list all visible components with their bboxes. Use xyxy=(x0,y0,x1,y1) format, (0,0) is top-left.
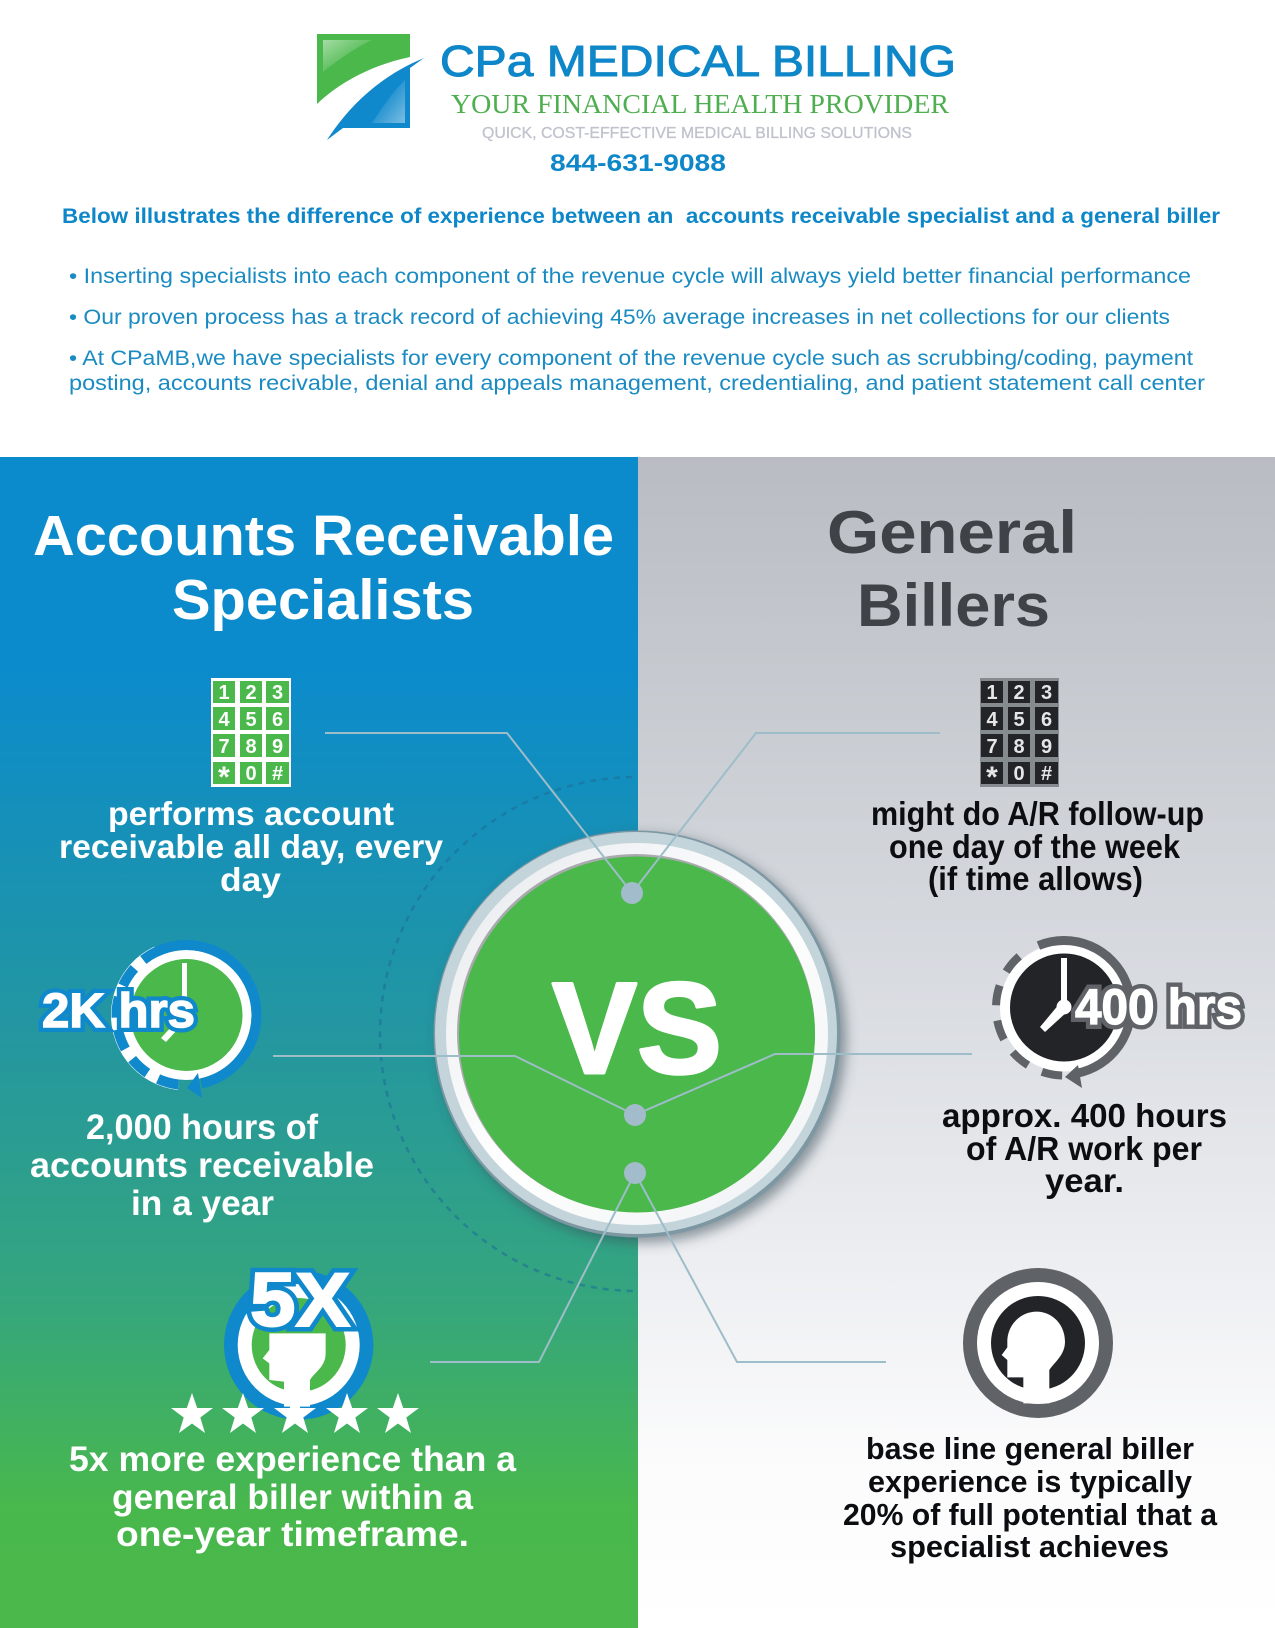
company name: CPa MEDICAL BILLING xyxy=(440,37,956,86)
text: approx. 400 hours: year. xyxy=(1045,1162,1124,1199)
text: 2,000 hours: in a year xyxy=(131,1184,274,1223)
text: base line general biller: base line general biller xyxy=(866,1431,1194,1466)
icon: five stars xyxy=(171,1393,419,1433)
panel: accounts receivable specialists background xyxy=(0,457,638,1628)
callout: 2K hrs: 2K hrs xyxy=(42,985,195,1038)
icon: green keypad: 0 xyxy=(245,763,257,785)
sub tagline: QUICK, COST-EFFECTIVE MEDICAL BILLING SOLUTIONS xyxy=(482,125,912,142)
text: 2,000 hours: 2,000 hours of xyxy=(86,1108,318,1147)
bullet 1: • Inserting specialists into each component of the revenue cycle will always yield better financial performance xyxy=(69,265,1191,288)
text: specialists perform AR every day: receivable all day, every xyxy=(59,828,444,865)
icon: dark keypad: 2 xyxy=(1013,682,1025,704)
icon: dark clock with 400 hrs xyxy=(977,920,1242,1095)
text: 5x more experience: 5x more experience than a xyxy=(69,1440,517,1479)
connector dot: top xyxy=(621,882,643,904)
icon: dark keypad: 4 xyxy=(986,709,998,731)
icon: dark keypad: * xyxy=(986,761,998,794)
icon: dark keypad: 3 xyxy=(1041,682,1052,704)
text: specialists perform AR every day xyxy=(59,795,444,898)
icon: green head with 5X xyxy=(224,1258,373,1420)
icon: dark keypad: 6 xyxy=(1041,709,1052,731)
bullet 3 xyxy=(69,347,1205,395)
heading: accounts receivable specialists xyxy=(33,504,614,632)
callout: 2K hrs: 2K hrs xyxy=(42,985,195,1038)
panel: general billers background xyxy=(638,457,1275,1628)
heading: accounts receivable specialists: Specialists xyxy=(172,568,474,632)
text: base line general biller: 20% of full potential that a xyxy=(843,1497,1218,1532)
intro bullet list xyxy=(69,265,1205,395)
connector dot: bottom xyxy=(624,1162,646,1184)
phone number: 844-631-9088 xyxy=(550,150,726,177)
icon: green keypad: 6 xyxy=(272,709,283,731)
vs label: VS xyxy=(552,955,722,1101)
icon: green keypad: # xyxy=(272,763,283,785)
text: specialists perform AR every day: performs account xyxy=(108,795,394,832)
icon: green keypad: 2 xyxy=(245,682,257,704)
text: billers might do AR one day: one day of the week xyxy=(889,828,1181,865)
icon: green keypad: 8 xyxy=(245,736,257,758)
bullet 3: • At CPaMB,we have specialists for every component of the revenue cycle such as scrubbing/coding, payment xyxy=(69,347,1193,370)
icon: dark keypad: 8 xyxy=(1013,736,1025,758)
heading: general billers: Billers xyxy=(857,572,1050,639)
text: approx. 400 hours: of A/R work per xyxy=(966,1130,1202,1167)
tagline: YOUR FINANCIAL HEALTH PROVIDER xyxy=(451,89,949,119)
text: 5x more experience: general biller within a xyxy=(112,1478,474,1517)
icon: green clock with 2K hrs xyxy=(42,922,280,1108)
text: billers might do AR one day: might do A/R follow-up xyxy=(871,795,1204,832)
icon: green keypad: 7 xyxy=(218,736,230,758)
callout: 5X: 5X xyxy=(250,1258,350,1343)
intro heading: Below illustrates the difference of experience between an accounts receivable specialist and a general biller xyxy=(62,205,1220,228)
heading: accounts receivable specialists: Accounts Receivable xyxy=(33,504,614,568)
text: billers might do AR one day xyxy=(871,795,1204,897)
icon: dark keypad: 9 xyxy=(1041,736,1052,758)
icon: green keypad: 4 xyxy=(218,709,230,731)
heading: general billers xyxy=(827,499,1077,639)
icon: dark keypad: 5 xyxy=(1013,709,1025,731)
callout: 400 hrs: 400 hrs xyxy=(1075,979,1242,1035)
icon: green keypad: 3 xyxy=(272,682,283,704)
heading: general billers: General xyxy=(827,499,1077,566)
dashed orbit ring xyxy=(378,776,633,1292)
icon: green keypad: 5 xyxy=(245,709,257,731)
text: base line general biller: specialist achieves xyxy=(890,1529,1169,1564)
header: logo and company name xyxy=(317,34,956,177)
bullet 2: • Our proven process has a track record of achieving 45% average increases in net collections for our clients xyxy=(69,306,1170,329)
bullet 3: posting, accounts recivable, denial and appeals management, credentialing, and patient statement call center xyxy=(69,372,1205,395)
text: base line general biller: experience is typically xyxy=(868,1464,1193,1499)
icon: dark keypad: # xyxy=(1041,763,1052,785)
text: 5x more experience: one-year timeframe. xyxy=(116,1515,469,1554)
text: base line general biller xyxy=(843,1431,1218,1564)
icon: dark keypad xyxy=(980,678,1059,794)
vs badge xyxy=(434,830,846,1243)
icon: dark keypad: 7 xyxy=(986,736,998,758)
connector lines xyxy=(273,733,972,1362)
logo mark xyxy=(317,34,424,140)
text: 2,000 hours xyxy=(30,1108,374,1223)
text: specialists perform AR every day: day xyxy=(220,861,282,898)
connector dot: middle xyxy=(624,1104,646,1126)
icon: green keypad: 9 xyxy=(272,736,283,758)
text: approx. 400 hours xyxy=(942,1097,1227,1199)
icon: dark head xyxy=(963,1268,1113,1418)
callout: 5X: 5X xyxy=(250,1258,350,1343)
icon: dark keypad: 0 xyxy=(1013,763,1025,785)
icon: green keypad xyxy=(211,678,291,794)
text: approx. 400 hours: approx. 400 hours xyxy=(942,1097,1227,1134)
icon: green keypad: * xyxy=(218,761,230,794)
text: 5x more experience xyxy=(69,1440,517,1554)
icon: green keypad: 1 xyxy=(218,682,230,704)
icon: dark keypad: 1 xyxy=(986,682,998,704)
text: billers might do AR one day: (if time allows) xyxy=(928,860,1143,897)
text: 2,000 hours: accounts receivable xyxy=(30,1146,374,1185)
callout: 400 hrs: 400 hrs xyxy=(1075,979,1242,1035)
